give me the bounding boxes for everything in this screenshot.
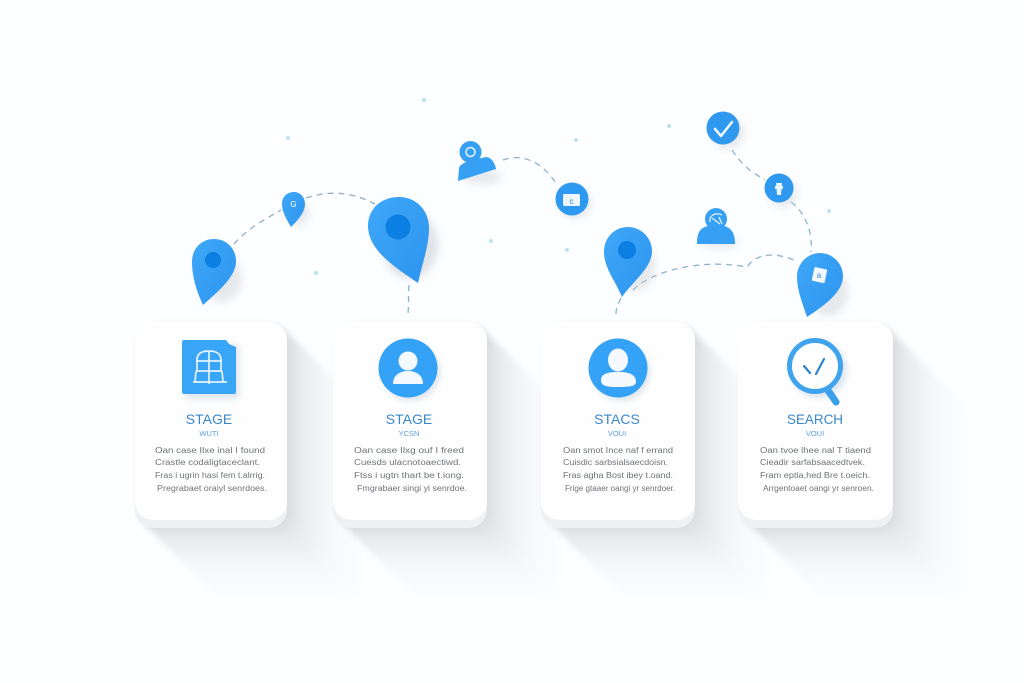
card 3 bbox=[541, 322, 695, 528]
body text: Cieadir sarfabsaacedtvek. bbox=[760, 458, 865, 467]
decorative dots bbox=[286, 98, 831, 275]
pin 4 bbox=[604, 227, 655, 297]
body text: Frige gtaaer oangi yr senrdoer. bbox=[565, 484, 675, 493]
pin 5 with document bbox=[797, 253, 848, 317]
body text: Oan smot Ince naf f errand bbox=[563, 446, 673, 455]
heading bbox=[787, 411, 843, 438]
pin 2 small: G bbox=[290, 200, 297, 209]
body text: Fram eptia,hed Bre t.oeich. bbox=[760, 471, 870, 480]
heading bbox=[594, 411, 640, 438]
heading: STACS bbox=[594, 411, 640, 427]
icon: thumb circle bbox=[764, 174, 797, 207]
body text: Pregrabaet oraiyl senrdoes. bbox=[157, 484, 267, 493]
body text: Fmgrabaer singi yi senrdoe. bbox=[357, 484, 467, 493]
body text: Cuisdic sarbsialsaecdoisn. bbox=[563, 458, 668, 467]
heading: SEARCH bbox=[787, 411, 843, 427]
body text: Oan case Ilxe inal I found bbox=[155, 446, 265, 455]
icon: magnifier check bbox=[790, 340, 847, 402]
heading: STAGE bbox=[186, 411, 232, 427]
icon: check circle bbox=[706, 112, 744, 149]
card 2 bbox=[333, 322, 487, 528]
icon: folder circle: c bbox=[570, 197, 574, 206]
heading: STAGE bbox=[386, 411, 432, 427]
body text: Cuesds ulacnotoaectiwd. bbox=[354, 458, 461, 467]
body text: Ftss i ugtn thart be t.iong. bbox=[354, 471, 464, 480]
card 4 bbox=[738, 322, 893, 528]
icon: cart document bbox=[182, 340, 239, 399]
body text: Fras agha Bost ibey t.oand. bbox=[563, 471, 673, 480]
body text: Crastle codaligtaceclant. bbox=[155, 458, 260, 467]
icon: person badge right bbox=[697, 208, 740, 248]
heading bbox=[186, 411, 232, 438]
body text: Fras i ugrin hasi fem t.alrrig. bbox=[155, 471, 265, 480]
pin 2 small bbox=[282, 192, 309, 227]
icon: person circle bbox=[378, 338, 440, 401]
pin 1 bbox=[192, 239, 242, 305]
body text: Arrgentoaet oangi yr senroen. bbox=[763, 484, 874, 493]
heading: VOUI bbox=[806, 429, 824, 438]
body text bbox=[563, 446, 675, 493]
heading bbox=[386, 411, 432, 438]
body text bbox=[354, 446, 467, 493]
body text bbox=[760, 446, 874, 493]
icon: folder circle bbox=[556, 182, 591, 219]
heading: WUTI bbox=[199, 429, 219, 438]
card 1 bbox=[135, 322, 287, 528]
pin 3 large bbox=[368, 197, 438, 283]
body text: Oan case Ilxg ouf I freed bbox=[354, 446, 464, 455]
pin 5 with document: a bbox=[817, 271, 822, 280]
body text: Oan tvoe lhee nal T tiaend bbox=[760, 446, 871, 455]
icon: person circle bbox=[588, 338, 650, 401]
heading: YCSN bbox=[399, 429, 419, 438]
dashed route lines bbox=[234, 150, 811, 314]
icon: person badge top bbox=[458, 141, 502, 184]
body text bbox=[155, 446, 267, 493]
heading: VOUI bbox=[608, 429, 626, 438]
long shadows bbox=[138, 325, 969, 602]
